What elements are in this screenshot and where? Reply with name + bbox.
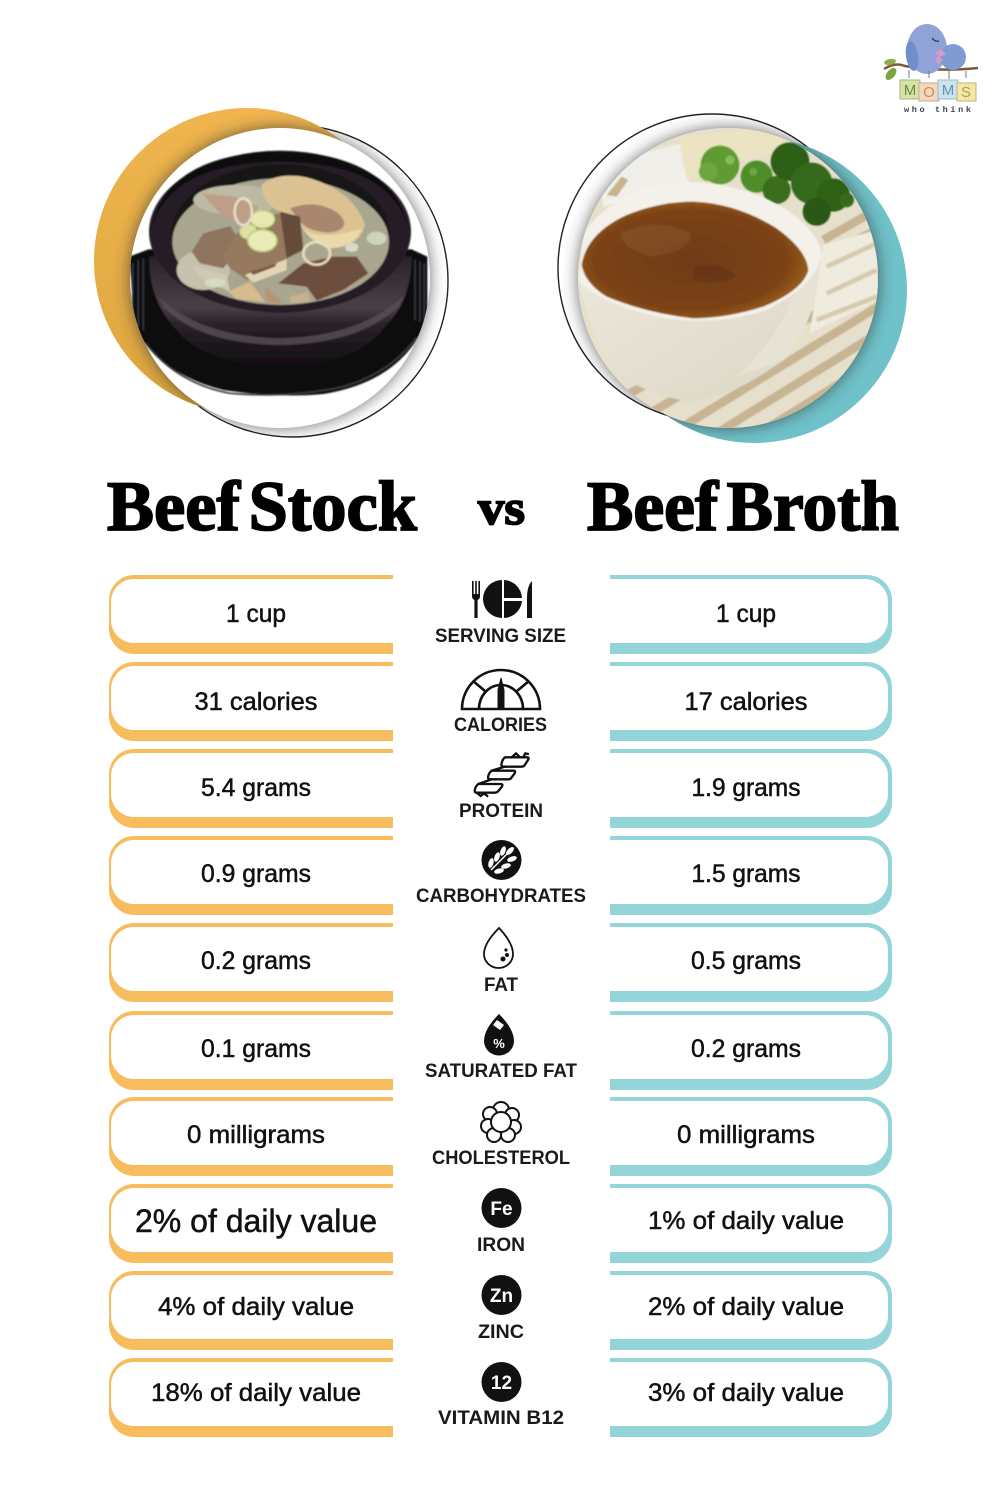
icon: B12 badge xyxy=(482,1362,522,1402)
logo: Moms Who Think xyxy=(883,24,978,115)
label: serving size: SERVING SIZE xyxy=(435,626,566,647)
broth xyxy=(172,178,389,305)
icon: saturated fat drop with percent: % xyxy=(493,1036,505,1051)
icon: Zn badge: Zn xyxy=(490,1286,513,1307)
row: saturated fat xyxy=(109,1011,892,1090)
cream block xyxy=(680,143,690,180)
label: fat: FAT xyxy=(484,975,518,996)
beef broth value: protein: 1.9 grams xyxy=(692,774,800,802)
meat xyxy=(202,194,258,224)
row: carbohydrates xyxy=(109,836,892,915)
beef stock value: serving size xyxy=(109,575,393,654)
beef broth value: carbohydrates: 1.5 grams xyxy=(692,860,800,888)
row: fat xyxy=(109,923,892,1002)
beef broth value: serving size xyxy=(610,575,892,654)
row: cholesterol xyxy=(109,1097,892,1176)
marrow bone xyxy=(262,176,365,248)
label: cholesterol: CHOLESTEROL xyxy=(432,1148,570,1169)
beef stock value: saturated fat: 0.1 grams xyxy=(201,1035,311,1063)
beef broth value: protein xyxy=(610,749,892,828)
icon: protein helix stairs xyxy=(475,753,529,796)
icon: saturated fat drop with percent xyxy=(484,1014,514,1056)
beef stock value: protein: 5.4 grams xyxy=(201,774,311,802)
beef stock value: saturated fat xyxy=(109,1011,393,1090)
beef broth value: calories xyxy=(610,662,892,741)
bowl xyxy=(578,182,822,402)
parsley xyxy=(699,142,854,226)
beef stock value: cholesterol xyxy=(109,1097,393,1176)
icon: B12 badge: 12 xyxy=(491,1373,512,1394)
logo: Moms Who Think: who think xyxy=(904,105,971,115)
beef stock value: fat xyxy=(109,923,393,1002)
beef broth value: calories: 17 calories xyxy=(684,688,808,716)
beef stock value: carbohydrates: 0.9 grams xyxy=(201,860,311,888)
logo: Moms Who Think: M xyxy=(942,82,954,99)
title: vs: vs xyxy=(478,480,525,535)
label: protein: PROTEIN xyxy=(459,801,543,822)
green onions xyxy=(204,198,387,287)
icon: Fe badge xyxy=(482,1188,522,1228)
beef broth value: cholesterol xyxy=(610,1097,892,1176)
title: Beef Stock: Beef Stock xyxy=(107,468,417,546)
label: zinc: ZINC xyxy=(478,1322,524,1343)
beef stock value: iron: 2% of daily value xyxy=(135,1203,377,1239)
beef stock value: carbohydrates xyxy=(109,836,393,915)
beef broth value: iron: 1% of daily value xyxy=(648,1207,844,1235)
icon: cholesterol cluster xyxy=(481,1102,521,1142)
label: saturated fat: SATURATED FAT xyxy=(425,1061,577,1082)
beef broth value: saturated fat: 0.2 grams xyxy=(691,1035,801,1063)
beef stock value: iron xyxy=(109,1184,393,1263)
row: vitamin b12 xyxy=(109,1358,892,1437)
beef broth value: fat: 0.5 grams xyxy=(691,947,801,975)
beef stock value: calories: 31 calories xyxy=(194,688,318,716)
white cloth background xyxy=(600,143,690,207)
beef stock value: vitamin b12: 18% of daily value xyxy=(151,1379,361,1407)
beef broth value: serving size: 1 cup xyxy=(716,600,776,628)
label: iron: IRON xyxy=(477,1235,525,1256)
pot body xyxy=(149,257,412,368)
row: protein xyxy=(109,749,892,828)
beef broth value: carbohydrates xyxy=(610,836,892,915)
beef stock value: vitamin b12 xyxy=(109,1358,393,1437)
logo: Moms Who Think: O xyxy=(923,84,935,101)
photo: beef stock in a black stone pot xyxy=(94,108,448,437)
icon: oil drop xyxy=(484,928,513,968)
beef broth value: iron xyxy=(610,1184,892,1263)
beef broth value: zinc xyxy=(610,1271,892,1350)
beef stock value: calories xyxy=(109,662,393,741)
beef broth value: cholesterol: 0 milligrams xyxy=(677,1121,815,1149)
beef stock value: zinc xyxy=(109,1271,393,1350)
beef broth value: vitamin b12 xyxy=(610,1358,892,1437)
beef stock value: cholesterol: 0 milligrams xyxy=(187,1121,325,1149)
photo: beef broth in a white bowl xyxy=(558,114,907,443)
row: calories xyxy=(109,662,892,741)
label: carbohydrates: CARBOHYDRATES xyxy=(416,886,586,907)
beef stock value: fat: 0.2 grams xyxy=(201,947,311,975)
icon: Zn badge xyxy=(482,1275,522,1315)
beef stock value: serving size: 1 cup xyxy=(226,600,286,628)
beef stock value: zinc: 4% of daily value xyxy=(158,1293,354,1321)
beef broth value: vitamin b12: 3% of daily value xyxy=(648,1379,844,1407)
beef broth value: zinc: 2% of daily value xyxy=(648,1293,844,1321)
title: Beef Broth: Beef Broth xyxy=(587,468,899,546)
tray xyxy=(129,249,427,395)
icon: plate with fork and knife xyxy=(472,580,532,618)
row: zinc xyxy=(109,1271,892,1350)
row: serving size xyxy=(109,575,892,654)
label: calories: CALORIES xyxy=(454,715,547,736)
logo: Moms Who Think: M xyxy=(904,82,916,99)
striped napkin xyxy=(630,213,883,437)
label: vitamin b12: VITAMIN B12 xyxy=(438,1408,564,1429)
beef broth value: fat xyxy=(610,923,892,1002)
icon: Fe badge: Fe xyxy=(490,1199,513,1220)
logo: Moms Who Think: S xyxy=(961,84,971,101)
icon: wheat in a circle xyxy=(482,840,522,880)
icon: calorie gauge xyxy=(462,670,540,709)
beef stock value: protein xyxy=(109,749,393,828)
beef broth value: saturated fat xyxy=(610,1011,892,1090)
central meat xyxy=(226,213,288,280)
rim xyxy=(149,151,411,313)
row: iron xyxy=(109,1184,892,1263)
